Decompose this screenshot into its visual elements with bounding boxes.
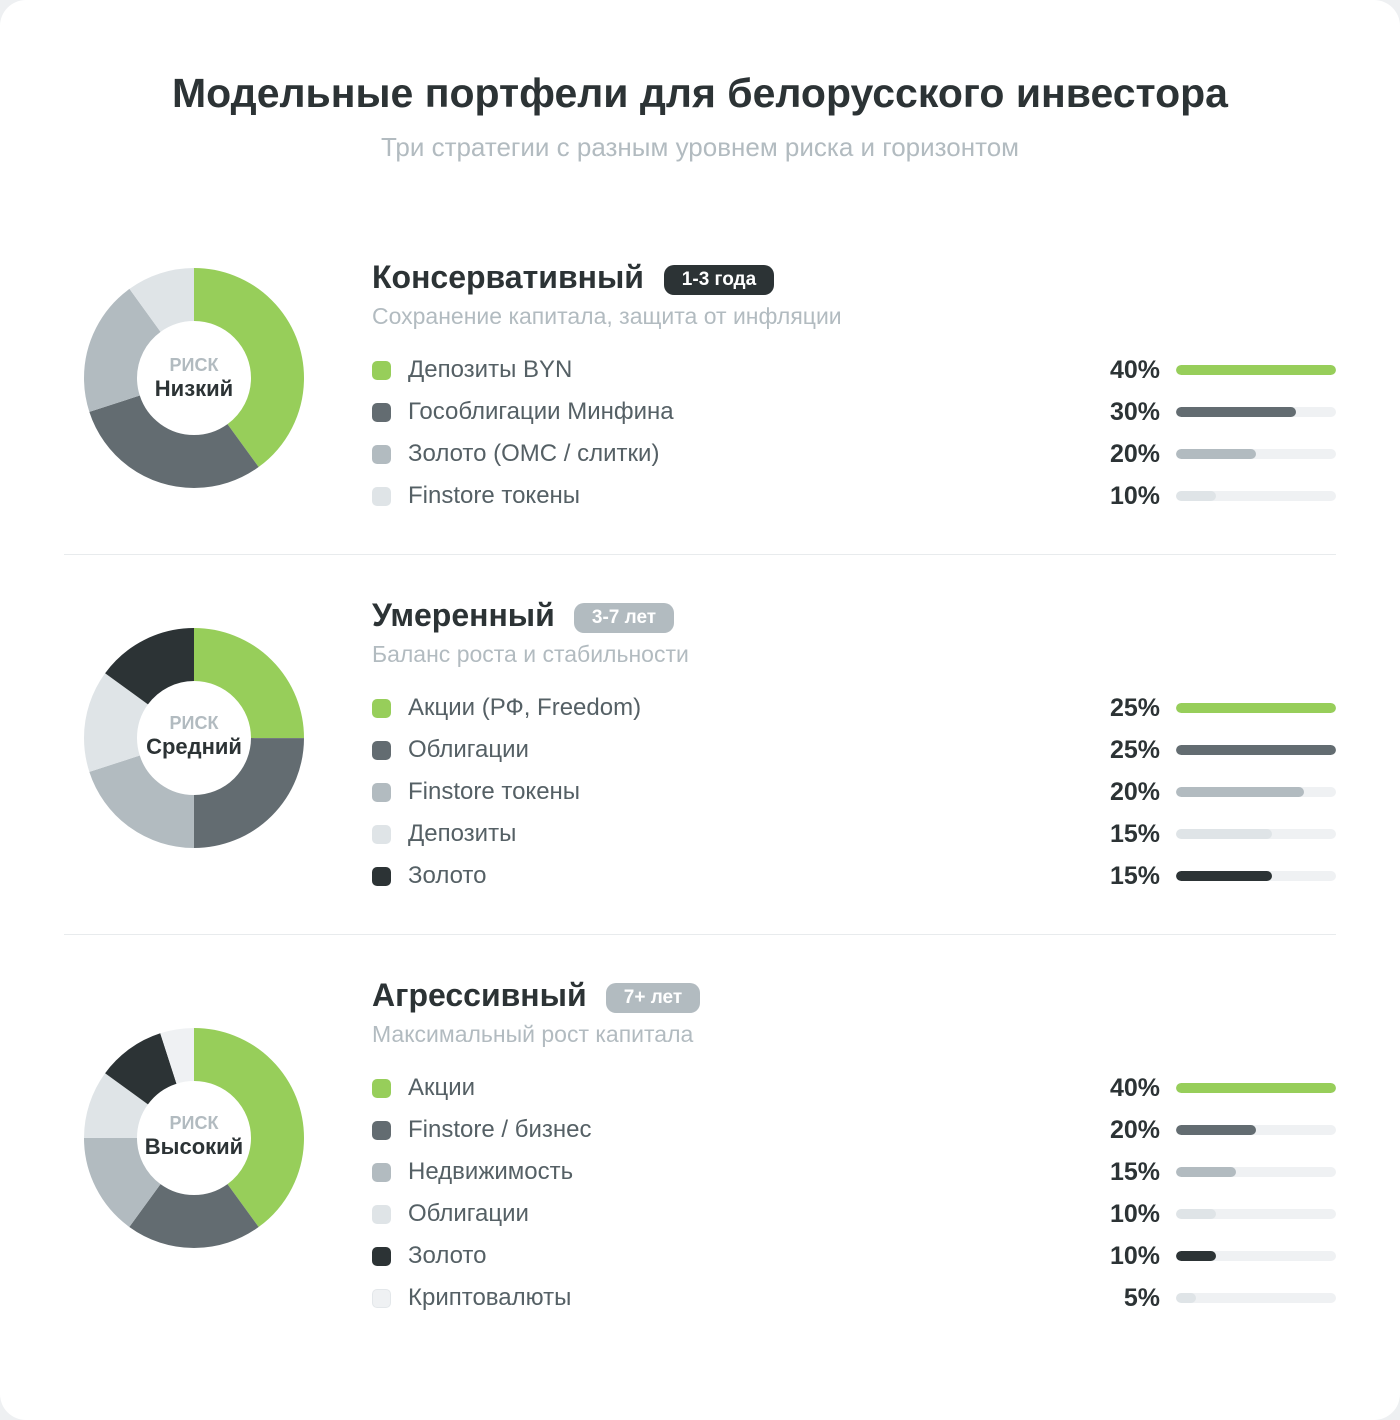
panel: moderate bbox=[84, 597, 1336, 890]
panel: conservative bbox=[84, 259, 1336, 510]
badge: 1-3 года bbox=[682, 269, 756, 290]
legend list bbox=[372, 694, 1336, 890]
legend list: Облигации bbox=[408, 1200, 529, 1227]
legend list: 25% bbox=[1110, 736, 1160, 764]
description: Максимальный рост капитала bbox=[372, 1021, 693, 1047]
description: Сохранение капитала, защита от инфляции bbox=[372, 303, 842, 329]
legend list: Золото bbox=[408, 862, 486, 889]
donut center label bbox=[146, 713, 242, 759]
legend list: 10% bbox=[1110, 1242, 1160, 1270]
badge bbox=[606, 983, 700, 1013]
legend list: 15% bbox=[1110, 862, 1160, 890]
donut center label: Средний bbox=[146, 734, 242, 759]
badge: 3-7 лет bbox=[592, 607, 656, 628]
donut center label: Низкий bbox=[155, 376, 233, 401]
donut center label: РИСК bbox=[170, 1113, 218, 1133]
badge: 7+ лет bbox=[624, 987, 682, 1008]
legend list: Finstore / бизнес bbox=[408, 1116, 591, 1143]
panel: aggressive bbox=[84, 977, 1336, 1312]
badge bbox=[664, 265, 774, 295]
legend list: Облигации bbox=[408, 736, 529, 763]
legend list bbox=[372, 356, 1336, 510]
donut: conservative bbox=[84, 268, 304, 488]
donut center label: РИСК bbox=[170, 355, 218, 375]
subtitle: Три стратегии с разным уровнем риска и горизонтом bbox=[381, 132, 1019, 162]
legend list: Золото bbox=[408, 1242, 486, 1269]
legend list: 40% bbox=[1110, 356, 1160, 384]
legend list: Гособлигации Минфина bbox=[408, 398, 674, 425]
legend list: Finstore токены bbox=[408, 482, 580, 509]
legend list: Золото (ОМС / слитки) bbox=[408, 440, 659, 467]
legend list: Депозиты BYN bbox=[408, 356, 572, 383]
donut center label: Высокий bbox=[145, 1134, 243, 1159]
legend list: Криптовалюты bbox=[408, 1284, 571, 1311]
legend list: 15% bbox=[1110, 1158, 1160, 1186]
legend list: 40% bbox=[1110, 1074, 1160, 1102]
heading: Агрессивный bbox=[372, 977, 587, 1013]
badge bbox=[574, 603, 674, 633]
legend list: 10% bbox=[1110, 1200, 1160, 1228]
description: Баланс роста и стабильности bbox=[372, 641, 689, 667]
legend list: Недвижимость bbox=[408, 1158, 573, 1185]
donut center label: РИСК bbox=[170, 713, 218, 733]
legend list: Finstore токены bbox=[408, 778, 580, 805]
legend list bbox=[372, 1074, 1336, 1312]
legend list: 20% bbox=[1110, 440, 1160, 468]
legend list: Депозиты bbox=[408, 820, 516, 847]
legend list: 20% bbox=[1110, 778, 1160, 806]
legend list: Акции bbox=[408, 1074, 475, 1101]
legend list: 5% bbox=[1124, 1284, 1160, 1312]
donut center label bbox=[145, 1113, 243, 1159]
legend list: 20% bbox=[1110, 1116, 1160, 1144]
legend list: Акции (РФ, Freedom) bbox=[408, 694, 641, 721]
title: Модельные портфели для белорусского инвестора bbox=[172, 70, 1228, 116]
donut: moderate bbox=[84, 628, 304, 848]
legend list: 15% bbox=[1110, 820, 1160, 848]
heading: Консервативный bbox=[372, 259, 644, 295]
donut: aggressive bbox=[84, 1028, 304, 1248]
legend list: 25% bbox=[1110, 694, 1160, 722]
heading: Умеренный bbox=[372, 597, 555, 633]
legend list: 30% bbox=[1110, 398, 1160, 426]
legend list: 10% bbox=[1110, 482, 1160, 510]
donut center label bbox=[155, 355, 233, 401]
